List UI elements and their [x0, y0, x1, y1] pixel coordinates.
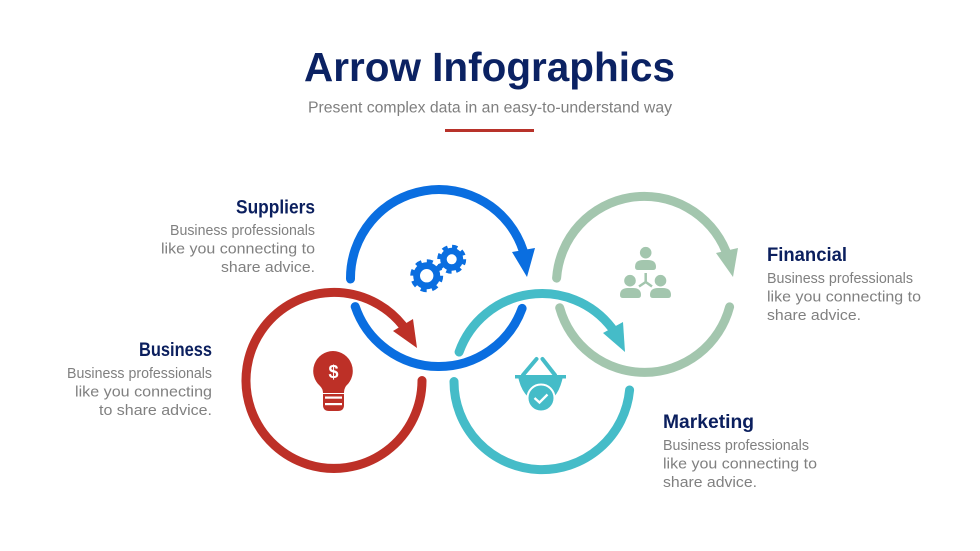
text block: marketing: share advice.: [663, 474, 757, 491]
icon: light bulb with dollar: [313, 351, 353, 411]
text block: suppliers: [161, 196, 315, 276]
text block: financial: Financial: [767, 244, 847, 266]
icon: people network: [620, 247, 671, 298]
text block: business: [67, 339, 212, 419]
title underline: [445, 129, 534, 132]
text block: business: Business: [139, 339, 212, 361]
text block: marketing: Marketing: [663, 411, 754, 433]
text block: marketing: Business professionals: [663, 437, 809, 454]
ring: red business arrow: [246, 292, 422, 468]
text block: suppliers: Business professionals: [170, 222, 315, 239]
text block: suppliers: Suppliers: [236, 196, 315, 218]
text block: marketing: [663, 411, 817, 491]
title: Arrow Infographics: [304, 44, 675, 90]
ring: teal marketing arrow: [454, 294, 630, 470]
text block: business: like you connecting: [75, 384, 212, 400]
text block: financial: [767, 244, 921, 324]
text block: business: to share advice.: [99, 402, 212, 419]
text block: suppliers: like you connecting to: [161, 240, 315, 258]
ring: blue suppliers arrow: [350, 190, 535, 367]
text block: financial: Business professionals: [767, 270, 913, 287]
text block: marketing: like you connecting to: [663, 456, 817, 472]
subtitle: Present complex data in an easy-to-understand way: [308, 100, 672, 116]
text block: financial: like you connecting to: [767, 288, 921, 306]
text block: suppliers: share advice.: [221, 259, 315, 276]
text block: business: Business professionals: [67, 365, 212, 382]
icon: gears: [412, 247, 464, 290]
icon: light bulb with dollar: $: [328, 362, 339, 382]
icon: basket with check: [515, 359, 566, 412]
text block: financial: share advice.: [767, 307, 861, 324]
ring: sage financial arrow: [557, 196, 738, 372]
